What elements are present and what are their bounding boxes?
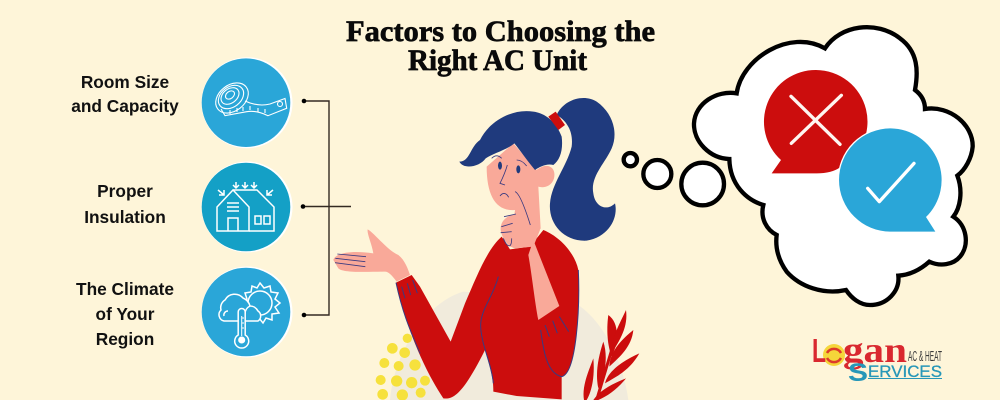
label: room size xyxy=(71,72,179,116)
small thought circles xyxy=(624,153,724,205)
label: climate xyxy=(76,279,174,349)
logo services: ERVICES xyxy=(868,363,942,381)
bracket connector xyxy=(301,99,351,317)
logo wordmark: L xyxy=(812,332,826,369)
label: insulation xyxy=(84,181,166,227)
label: climate: Region xyxy=(96,329,154,349)
icon: climate cloud sun thermometer xyxy=(202,266,292,358)
eyes xyxy=(498,162,520,173)
title: Right AC Unit xyxy=(408,44,587,77)
ponytail xyxy=(550,98,616,241)
label: room size: and Capacity xyxy=(71,96,179,116)
label: room size: Room Size xyxy=(81,72,170,92)
logo big S: S xyxy=(848,359,868,387)
label: insulation: Insulation xyxy=(84,207,166,227)
sweater seams xyxy=(396,270,579,383)
icon: tape measure xyxy=(202,57,292,148)
hair band xyxy=(548,112,565,130)
yellow dots xyxy=(376,334,430,400)
raised hand xyxy=(501,192,540,248)
sweater xyxy=(396,230,579,399)
logo: Logan Services: gan xyxy=(843,330,907,370)
label: climate: of Your xyxy=(96,304,155,324)
cloud xyxy=(694,27,973,305)
hand lines and facial features xyxy=(492,156,530,246)
hair xyxy=(459,111,562,170)
label: insulation: Proper xyxy=(97,181,153,201)
open hand xyxy=(333,229,410,282)
red leaf xyxy=(584,310,639,400)
icon: insulated house xyxy=(202,162,292,252)
label: climate: The Climate xyxy=(76,279,174,299)
logo: Logan Services xyxy=(812,330,942,387)
background blob xyxy=(390,292,628,400)
logo sun xyxy=(823,344,845,366)
woman thinking illustration xyxy=(333,98,639,400)
palm lines xyxy=(335,254,366,267)
red speech bubble with cross xyxy=(764,70,867,173)
thought bubble xyxy=(624,27,973,305)
title xyxy=(346,15,655,77)
blue speech bubble with check xyxy=(839,128,942,232)
forearm xyxy=(528,240,559,320)
title: Factors to Choosing the xyxy=(346,15,655,48)
face and neck xyxy=(487,143,554,247)
infographic canvas: AC & HEAT xyxy=(908,348,942,365)
